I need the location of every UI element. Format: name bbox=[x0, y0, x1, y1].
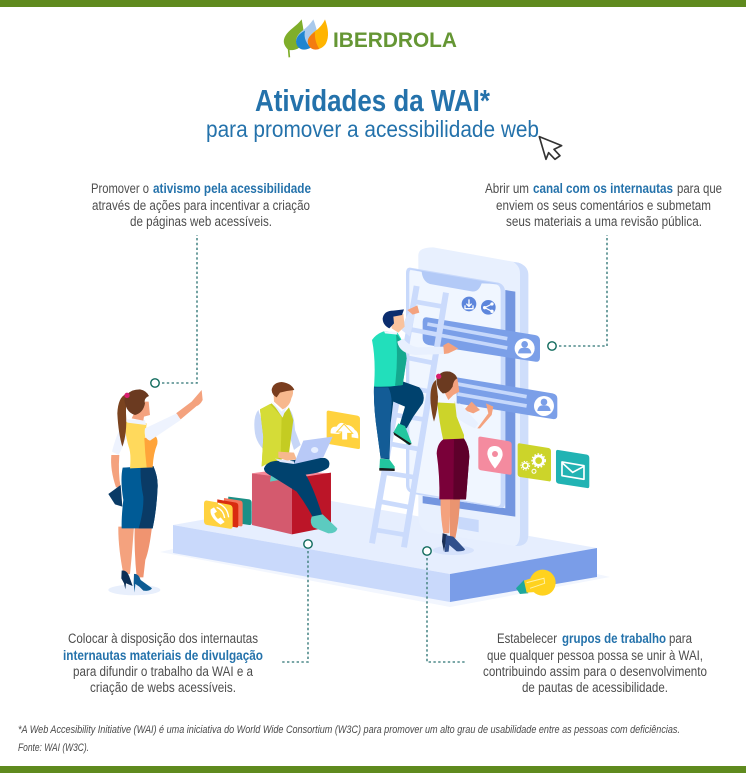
illustration: phone bbox=[406, 247, 589, 546]
folder bbox=[108, 485, 122, 507]
text block: working groups: Estabelecer bbox=[497, 631, 557, 646]
face bbox=[392, 314, 405, 333]
icon stack: phone cards bbox=[204, 497, 252, 529]
skirt bbox=[121, 466, 158, 528]
face bbox=[445, 378, 459, 400]
icon: download bbox=[462, 297, 476, 311]
text block: working groups: para bbox=[669, 631, 692, 646]
comment bubble 2 bbox=[457, 377, 557, 419]
person: seated man bbox=[254, 382, 337, 533]
shoe bbox=[311, 514, 337, 533]
person: man climbing ladder bbox=[372, 305, 458, 471]
icon: share bbox=[481, 300, 496, 315]
text block: activism: ativismo pela acessibilidade bbox=[153, 181, 311, 196]
text block: materials: Colocar à disposição dos internautas bbox=[68, 631, 258, 646]
title: Atividades da WAI* bbox=[255, 83, 491, 118]
text block: working groups bbox=[483, 631, 707, 695]
connector: materials bbox=[281, 540, 312, 662]
hair bbox=[272, 382, 294, 397]
hair bbox=[437, 371, 457, 393]
text block: materials: para difundir o trabalho da WAI e a bbox=[73, 664, 253, 679]
hair bbox=[383, 309, 404, 328]
icon: cloud upload bbox=[327, 411, 360, 449]
text block: activism: de páginas web acessíveis. bbox=[130, 214, 272, 229]
heels bbox=[121, 570, 133, 589]
hand bbox=[278, 452, 297, 461]
top green bar bbox=[0, 0, 746, 7]
far arm bbox=[402, 312, 415, 337]
hair bbox=[124, 389, 149, 415]
vest bbox=[260, 403, 293, 467]
blouse bbox=[125, 422, 153, 468]
shoes bbox=[393, 423, 412, 445]
text block: activism: Promover o bbox=[91, 181, 149, 196]
text block: channel: enviem os seus comentários e submetam bbox=[496, 198, 711, 213]
logo: Iberdrola: IBERDROLA bbox=[333, 29, 457, 52]
skirt bbox=[437, 439, 469, 499]
text block: channel: canal com os internautas bbox=[533, 181, 673, 196]
subtitle: para promover a acessibilidade web bbox=[206, 116, 539, 142]
text block: working groups: grupos de trabalho bbox=[562, 631, 666, 646]
illustration: platform bbox=[160, 499, 610, 607]
text block: channel bbox=[485, 181, 722, 229]
collar bbox=[384, 331, 397, 335]
blouse bbox=[437, 402, 464, 441]
text block: channel: para que bbox=[677, 181, 722, 196]
logo: Iberdrola bbox=[284, 19, 457, 57]
neck + face bbox=[273, 388, 293, 409]
text block: materials: internautas materiais de divulgação bbox=[63, 648, 263, 663]
ponytail bbox=[117, 394, 126, 447]
comment bubble 1 bbox=[423, 317, 540, 362]
far arm and hands bbox=[464, 402, 480, 413]
sleeves bbox=[254, 410, 279, 457]
text block: channel: seus materiais a uma revisão pública. bbox=[506, 214, 702, 229]
icon: envelope bbox=[556, 450, 589, 488]
woman lower legs and heels bbox=[433, 497, 474, 555]
laptop bbox=[294, 437, 333, 464]
illustration: red cube seat bbox=[252, 470, 331, 534]
raised arm bbox=[176, 390, 203, 419]
text block: working groups: contribuindo assim para o desenvolvimento bbox=[483, 664, 707, 679]
illustration: ladder bbox=[372, 286, 446, 547]
pants bbox=[264, 461, 323, 518]
left arm bbox=[111, 455, 121, 487]
legs bbox=[118, 527, 134, 574]
text block: materials: criação de webs acessíveis. bbox=[90, 680, 236, 695]
text block: channel: Abrir um bbox=[485, 181, 529, 196]
text block: materials bbox=[63, 631, 263, 695]
text block: working groups: de pautas de acessibilidade. bbox=[522, 680, 668, 695]
connector: working groups bbox=[423, 547, 465, 662]
collar bbox=[127, 419, 146, 425]
source: Fonte: WAI (W3C). bbox=[18, 742, 89, 754]
person: standing woman with raised arm bbox=[108, 389, 203, 595]
bottom green bar bbox=[0, 766, 746, 773]
icon: cursor bbox=[539, 137, 562, 159]
back leg bbox=[290, 458, 329, 476]
pants bbox=[374, 382, 424, 459]
icon: gears bbox=[518, 443, 551, 481]
text block: working groups: que qualquer pessoa possa se unir à WAI, bbox=[487, 648, 703, 663]
shirt bbox=[372, 331, 407, 387]
connector: channel bbox=[548, 235, 607, 350]
text block: activism: através de ações para incentivar a criação bbox=[92, 198, 310, 213]
connector: activism bbox=[151, 235, 197, 387]
collar bbox=[439, 398, 455, 403]
near arm bbox=[397, 339, 444, 355]
face bbox=[132, 402, 150, 421]
text block: activism bbox=[91, 181, 311, 229]
person: woman at the screen bbox=[430, 371, 493, 499]
icon: location pin bbox=[478, 437, 512, 475]
shirt collar bbox=[272, 402, 287, 418]
icon: light bulb bbox=[516, 570, 556, 596]
ponytail bbox=[430, 380, 438, 422]
